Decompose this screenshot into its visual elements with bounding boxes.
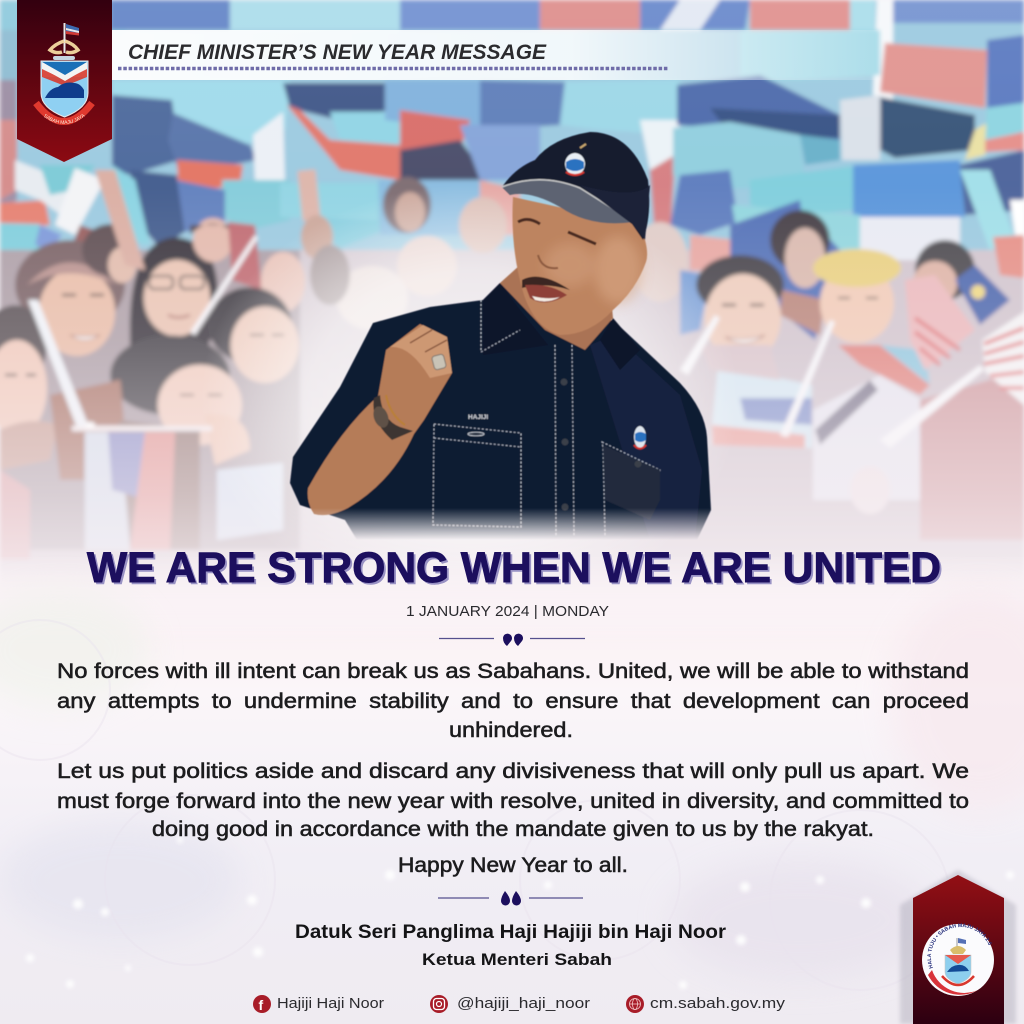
face (512, 197, 647, 335)
closing greeting: Happy New Year to all. (398, 854, 628, 877)
neck (500, 265, 613, 350)
right banner with logo (898, 870, 1018, 1024)
signatory title: Ketua Menteri Sabah (422, 950, 612, 969)
central glow behind figure (200, 185, 740, 615)
crowd left (0, 169, 321, 560)
message paragraph two (57, 760, 969, 841)
signatory name: Datuk Seri Panglima Haji Hajiji bin Haji Noor (295, 921, 726, 943)
eyes and nose (518, 219, 596, 244)
social: website: cm.sabah.gov.my (650, 995, 786, 1012)
message paragraph one (57, 660, 969, 742)
icon: arms holding pole (50, 41, 78, 53)
ring (431, 354, 447, 370)
social: facebook: Hajiji Haji Noor (277, 995, 384, 1012)
social: instagram (430, 995, 590, 1013)
crowd centre (301, 177, 507, 330)
lower background with bokeh (0, 575, 1024, 1024)
white wash over photo (0, 0, 1024, 620)
social: facebook: f (258, 997, 264, 1013)
header band (112, 30, 880, 80)
round logo (922, 923, 994, 996)
mustache and mouth (522, 277, 570, 290)
message paragraph two: Let us put politics aside and discard any divisiveness that will only pull us apart. We (57, 760, 969, 783)
flags upper left (0, 80, 400, 315)
flags upper right (670, 0, 1024, 278)
main figure (290, 132, 711, 540)
chest stitching (433, 300, 660, 535)
icon: state flag (64, 23, 79, 53)
collar (483, 283, 640, 370)
bracelet (371, 395, 413, 440)
message paragraph one: unhindered. (449, 719, 573, 742)
message paragraph one: No forces with ill intent can break us as Sabahans. United, we will be able to withstand (57, 660, 969, 683)
flags top row (0, 0, 1024, 210)
shirt badge (634, 426, 646, 448)
bottom quote divider (438, 891, 583, 906)
social: instagram: @hajiji_haji_noor (457, 995, 590, 1012)
shirt shadow (590, 341, 702, 522)
flags centre (0, 30, 680, 240)
left banner with Sabah crest (17, 0, 112, 162)
breast pocket flap (603, 445, 660, 520)
name tag: HAJIJI (468, 414, 488, 421)
header title: CHIEF MINISTER’S NEW YEAR MESSAGE (128, 41, 547, 64)
main headline: WE ARE STRONG WHEN WE ARE UNITED (89, 546, 943, 594)
shirt (290, 283, 711, 540)
top quote divider (439, 634, 585, 646)
motto ribbon (33, 101, 95, 125)
round logo: HALA TUJU • SABAH MAJU JAYA 2.0 (927, 923, 992, 969)
social: website (626, 995, 786, 1013)
message paragraph one: any attempts to undermine stability and to ensure that development can proceed (57, 690, 969, 713)
crowd right (632, 210, 1024, 540)
message paragraph two: must forge forward into the new year with resolve, united in diversity, and committed to (57, 790, 969, 813)
main headline: WE ARE STRONG WHEN WE ARE UNITED (87, 544, 941, 592)
background crowd photo (0, 0, 1024, 620)
icon: shield (41, 56, 88, 117)
buttons (560, 378, 642, 510)
message paragraph two: doing good in accordance with the mandate given to us by the rakyat. (152, 818, 874, 841)
arm and fist (308, 324, 452, 515)
motto ribbon: SABAH MAJU JAYA (44, 114, 85, 124)
cap badge (565, 144, 586, 175)
cap (502, 132, 649, 240)
date line: 1 JANUARY 2024 | MONDAY (406, 603, 609, 620)
